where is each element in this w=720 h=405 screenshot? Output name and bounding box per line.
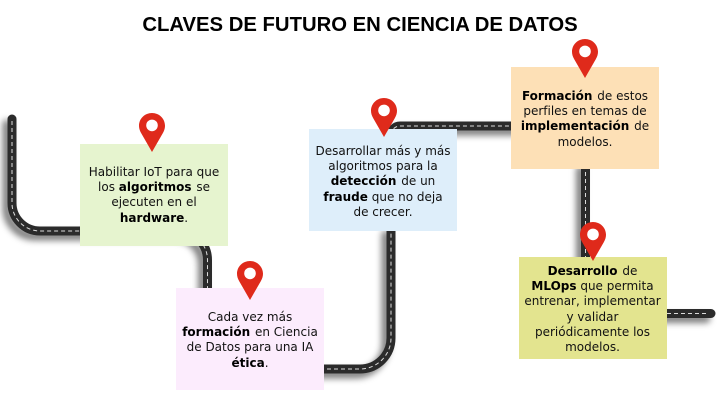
icon: map pin 1 <box>139 113 165 152</box>
panel: ethics training card <box>176 288 324 390</box>
panel: fraud detection card <box>309 129 457 231</box>
panel: MLOps card: modelos. <box>565 340 620 354</box>
panel: MLOps card: MLOps que permita <box>531 279 654 293</box>
panel: fraud detection card: Desarrollar más y más <box>315 144 451 158</box>
panel: ethics training card: formación en Ciencia <box>182 325 318 339</box>
icon: map pin 5 <box>580 222 606 261</box>
panel: implementation training card: Formación de estos <box>522 88 648 102</box>
panel: implementation training card: modelos. <box>558 135 612 149</box>
title: CLAVES DE FUTURO EN CIENCIA DE DATOS <box>142 14 578 36</box>
icon: map pin 4 <box>572 39 598 78</box>
panel: implementation training card: perfiles en temas de <box>523 104 647 118</box>
panel: ethics training card: Cada vez más <box>208 310 292 324</box>
panel: IoT card: los algoritmos se <box>98 180 210 194</box>
panel: fraud detection card: de crecer. <box>353 205 413 219</box>
panel: IoT card: hardware. <box>120 211 188 225</box>
panel: IoT card: ejecuten en el <box>111 195 197 209</box>
panel: fraud detection card: algoritmos para la <box>328 159 438 173</box>
panel: MLOps card <box>518 257 666 359</box>
panel: MLOps card: y validar <box>567 310 618 324</box>
panel: ethics training card: de Datos para una IA <box>187 340 313 354</box>
icon: map pin 3 <box>371 98 397 137</box>
panel: ethics training card: ética. <box>231 356 269 370</box>
icon: map pin 2 <box>237 261 263 300</box>
panel: IoT card: Habilitar IoT para que <box>89 164 219 178</box>
panel: implementation training card: implementación de <box>521 119 649 133</box>
panel: IoT card <box>80 144 228 246</box>
panel: MLOps card: entrenar, implementar <box>524 294 661 308</box>
panel: MLOps card: Desarrollo de <box>548 264 637 278</box>
panel: MLOps card: periódicamente los <box>535 325 650 339</box>
panel: fraud detection card: detección de un <box>331 174 435 188</box>
panel: implementation training card <box>511 67 659 169</box>
panel: fraud detection card: fraude que no deja <box>323 190 443 204</box>
